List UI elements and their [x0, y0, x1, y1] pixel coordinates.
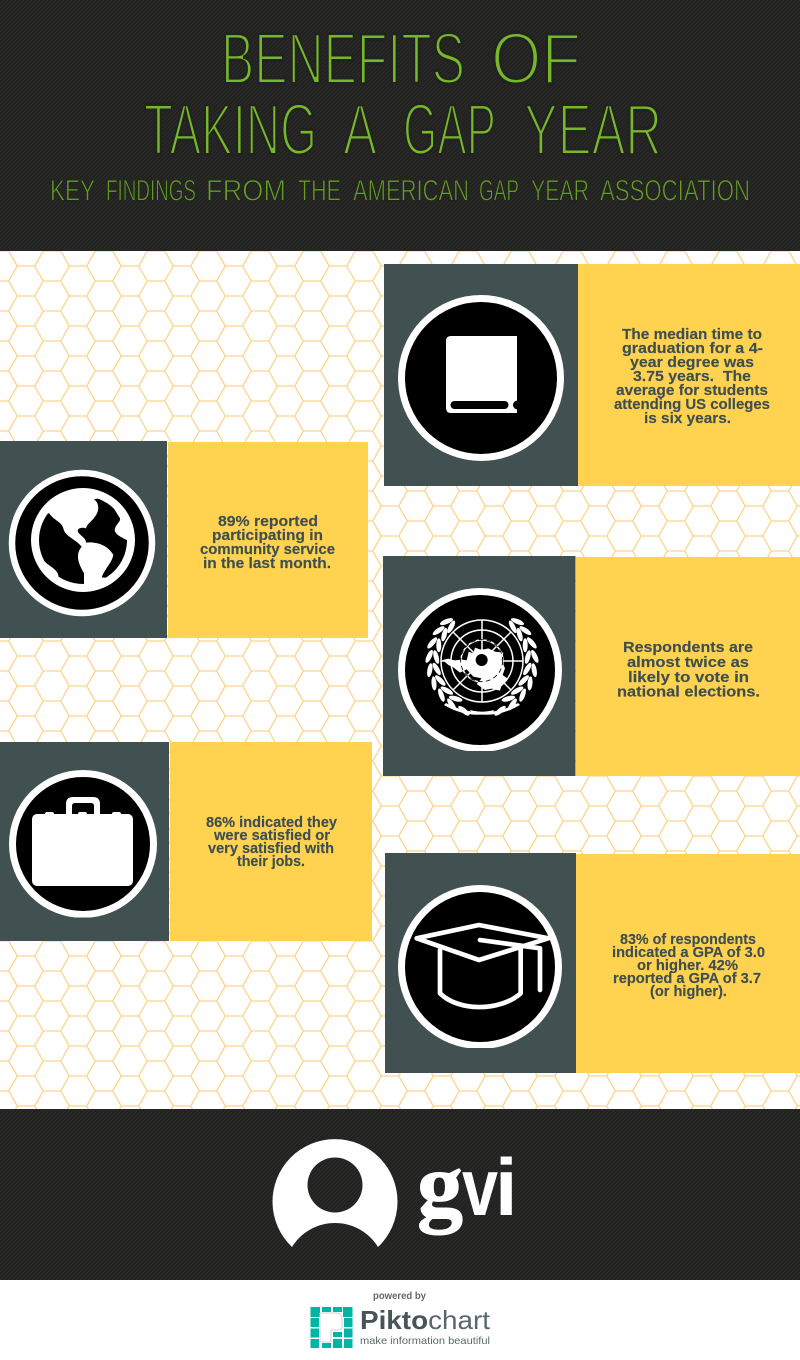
logo: gvi wordmark: g	[417, 1136, 463, 1235]
text block: almost twice as	[627, 654, 749, 671]
title: OF	[491, 20, 581, 100]
text block: in the last month.	[203, 555, 331, 572]
text block	[200, 513, 335, 572]
title: YEAR	[524, 90, 662, 170]
subtitle: ASSOCIATION	[600, 174, 750, 208]
subtitle: FROM	[206, 174, 286, 208]
text block: were satisfied or	[213, 827, 330, 844]
icon: briefcase	[12, 774, 154, 922]
title	[144, 20, 662, 170]
text block: attending US colleges	[614, 396, 770, 413]
subtitle: KEY	[50, 174, 95, 208]
logo: piktochart icon	[310, 1307, 352, 1348]
text block: 83% of respondents	[620, 931, 756, 948]
text block: indicated a GPA of 3.0	[612, 944, 765, 961]
subtitle: YEAR	[531, 174, 589, 208]
powered by: powered by	[373, 1291, 426, 1302]
text block: 89% reported	[218, 513, 318, 530]
text block: graduation for a 4-	[622, 340, 763, 357]
text block: their jobs.	[237, 853, 305, 870]
icon: globe	[12, 473, 152, 613]
title: GAP	[403, 90, 496, 170]
logo: gvi mark	[273, 1139, 398, 1247]
title: A	[343, 90, 377, 170]
title: TAKING	[144, 90, 317, 170]
text block: The median time to	[622, 326, 762, 343]
subtitle: AMERICAN	[353, 174, 469, 208]
header band	[0, 0, 800, 251]
text block: year degree was	[630, 354, 754, 371]
text block: is six years.	[644, 410, 731, 427]
panel: job satisfaction	[0, 742, 372, 941]
subtitle: GAP	[479, 174, 519, 208]
text block: 86% indicated they	[206, 814, 338, 831]
footer band	[0, 1109, 800, 1280]
logo: gvi wordmark: i	[495, 1143, 518, 1233]
subtitle: FINDINGS	[106, 174, 196, 208]
subtitle	[50, 174, 750, 208]
icon: book	[402, 298, 560, 458]
panel: voting	[383, 556, 800, 776]
text block: national elections.	[617, 684, 760, 700]
text block	[612, 931, 765, 1000]
logo: piktochart wordmark: Piktochart	[360, 1305, 491, 1335]
logo: gvi wordmark	[417, 1136, 518, 1235]
text block	[617, 639, 760, 700]
panel: community service	[0, 441, 368, 638]
text block: Respondents are	[623, 639, 753, 656]
text block: very satisfied with	[208, 840, 334, 857]
icon: graduation cap	[400, 888, 560, 1054]
text block: (or higher).	[650, 983, 727, 1000]
hexagon background	[0, 251, 800, 1109]
text block	[614, 326, 770, 427]
panel: GPA	[385, 853, 800, 1073]
text block: reported a GPA of 3.7	[613, 970, 761, 987]
icon: UN emblem	[400, 592, 560, 759]
tagline: make information beautiful	[360, 1335, 490, 1347]
text block	[206, 814, 338, 870]
text block: 3.75 years. The	[633, 368, 751, 385]
subtitle: THE	[298, 174, 341, 208]
text block: likely to vote in	[628, 669, 749, 686]
text block: participating in	[212, 527, 323, 544]
text block: average for students	[616, 382, 768, 399]
panel: graduation time	[384, 264, 800, 486]
title: BENEFITS	[221, 20, 465, 100]
logo: gvi wordmark: v	[462, 1143, 498, 1233]
text block: community service	[200, 541, 335, 558]
text block: or higher. 42%	[637, 957, 738, 974]
